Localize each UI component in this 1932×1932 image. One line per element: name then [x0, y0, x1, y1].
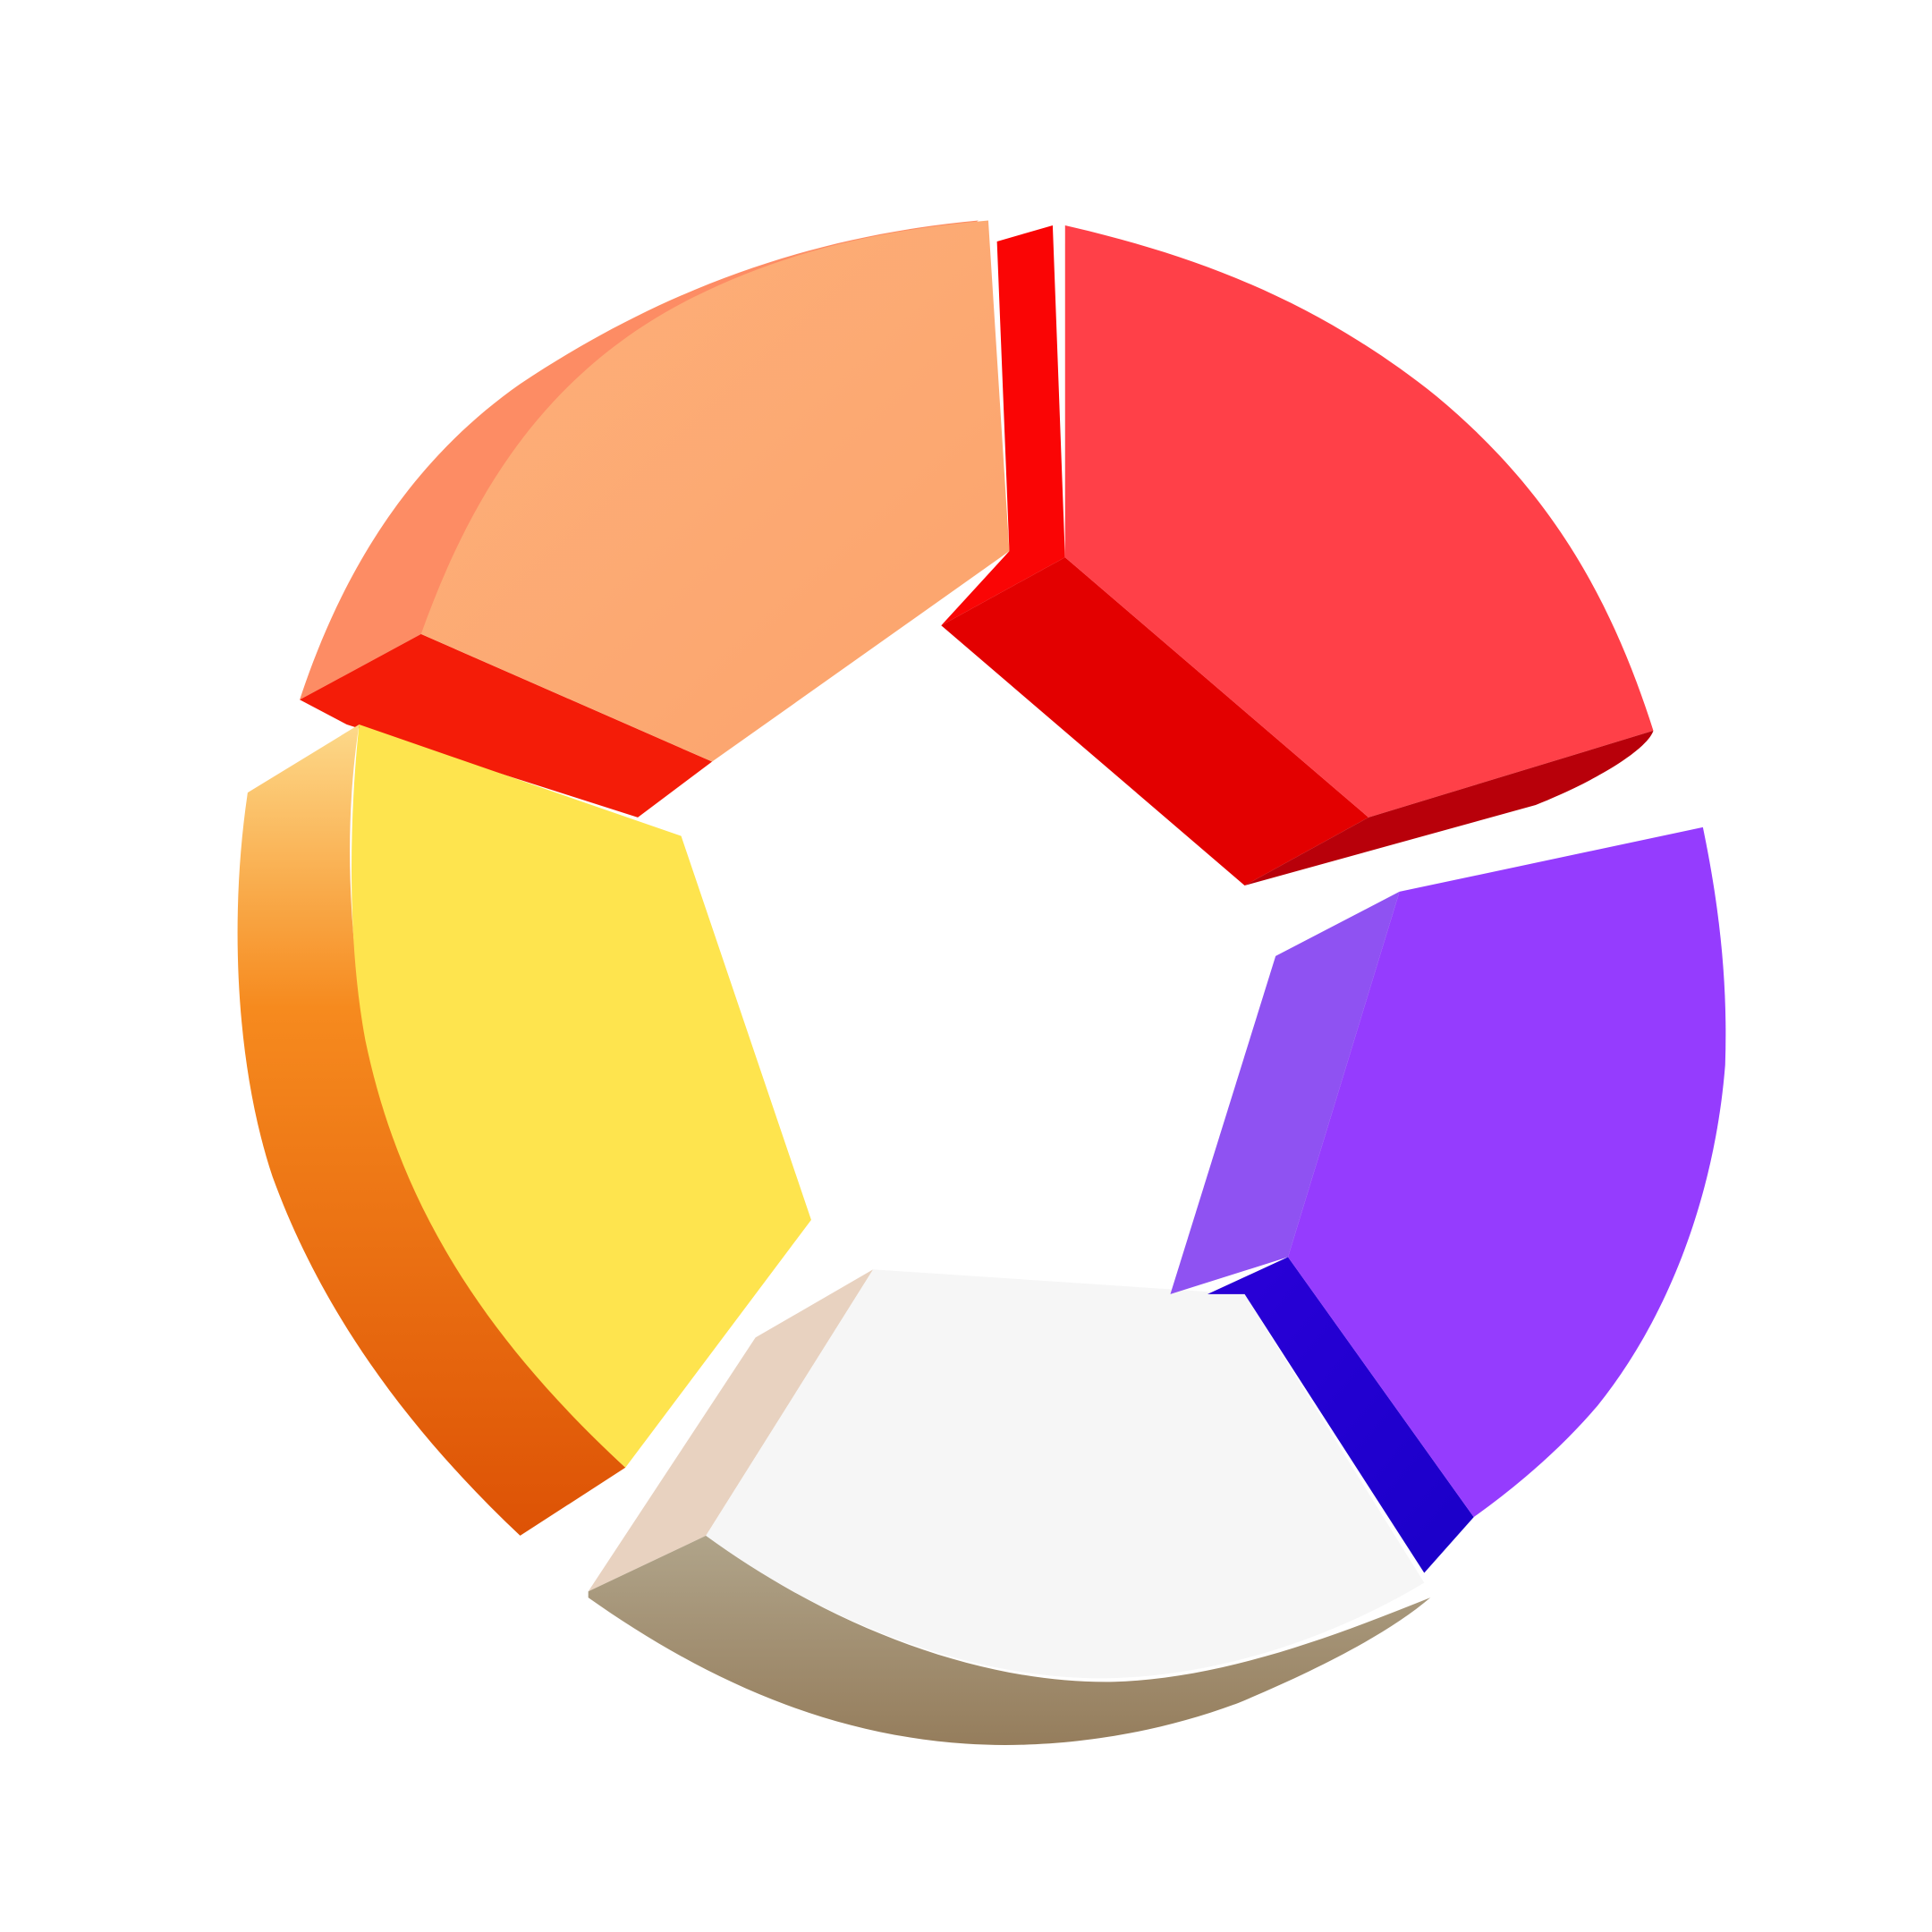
segment: white [589, 1269, 1430, 1745]
segment: yellow [238, 724, 811, 1536]
segment: orange [300, 220, 1009, 818]
segment: purple [1170, 827, 1725, 1572]
segment: red [941, 225, 1653, 886]
